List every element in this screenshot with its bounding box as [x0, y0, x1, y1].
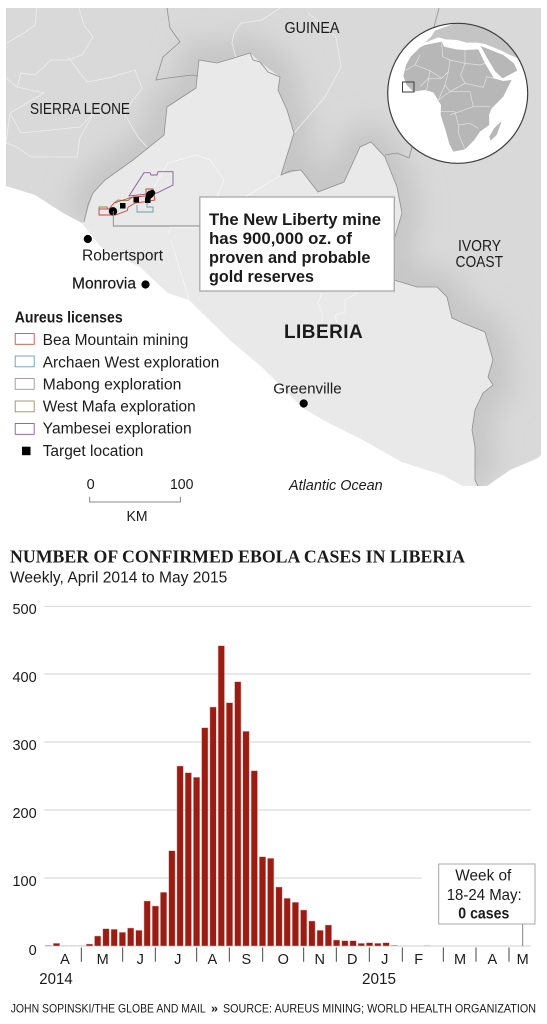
callout: week of 18-24 May: 18-24 May: — [447, 887, 522, 904]
Madagascar — [489, 122, 502, 141]
legend: Aureus licenses: Aureus licenses — [15, 310, 123, 327]
map of Liberia region — [6, 8, 541, 498]
Archaen West exploration — [137, 203, 153, 212]
legend: Aureus licenses: Bea Mountain mining — [43, 332, 188, 349]
month ticks — [81, 948, 509, 962]
map labels: Robertsport — [82, 248, 164, 264]
Africa — [403, 42, 512, 152]
legend: Aureus licenses: West Mafa exploration — [43, 399, 196, 416]
map labels: Greenville — [273, 380, 342, 397]
locator square — [402, 82, 414, 92]
y axis labels: 500 — [12, 602, 37, 618]
month labels — [60, 952, 529, 968]
month labels: M — [517, 952, 529, 968]
source line: » — [211, 1001, 218, 1015]
map labels: Atlantic Ocean — [288, 477, 383, 494]
Bea Mountain mining — [99, 189, 155, 215]
bar chart: weekly confirmed Ebola cases — [12, 602, 531, 988]
month labels: M — [454, 952, 466, 968]
y axis labels — [12, 602, 37, 959]
icon: locator globe — [388, 22, 528, 163]
West Mafa exploration — [99, 198, 132, 209]
map labels: GUINEA — [284, 20, 340, 37]
scale bar: 0 — [87, 477, 95, 493]
callout: New Liberty mine: gold reserves — [209, 267, 314, 286]
Liberia land border — [84, 53, 493, 486]
month labels: J — [174, 952, 181, 968]
month labels: D — [347, 952, 358, 968]
callout: New Liberty mine — [109, 197, 394, 291]
month labels: N — [314, 952, 325, 968]
target locations — [120, 190, 155, 208]
scale bar: 100 — [170, 477, 193, 493]
y axis labels: 100 — [12, 874, 37, 890]
y axis labels: 400 — [12, 670, 37, 686]
year labels — [39, 971, 396, 988]
month labels: M — [97, 952, 109, 968]
map labels: COAST — [456, 254, 503, 271]
map labels: Monrovia — [72, 276, 136, 293]
legend: Aureus licenses: Yambesei exploration — [43, 421, 192, 438]
chart subtitle: Weekly, April 2014 to May 2015 — [10, 570, 227, 587]
map labels — [30, 20, 503, 494]
legend: Aureus licenses: Mabong exploration — [43, 376, 181, 393]
Europe — [425, 22, 518, 58]
y axis labels: 300 — [12, 738, 37, 754]
legend: Aureus licenses: Archaen West exploration — [43, 354, 219, 371]
source line: JOHN SOPINSKI/THE GLOBE AND MAIL — [11, 1001, 206, 1015]
callout: week of 18-24 May — [439, 864, 535, 946]
year labels: 2014 — [39, 971, 73, 988]
month labels: S — [241, 952, 251, 968]
scale bar: KM — [126, 509, 148, 525]
legend: Aureus licenses: Target location — [43, 443, 143, 460]
month labels: A — [60, 952, 70, 968]
month labels: J — [381, 952, 388, 968]
legend: Aureus licenses — [15, 310, 219, 460]
license areas — [99, 172, 173, 215]
city dots — [84, 235, 308, 408]
map labels: SIERRA LEONE — [30, 101, 130, 118]
callout: New Liberty mine: The New Liberty mine — [209, 210, 381, 229]
month labels: A — [207, 952, 217, 968]
map labels: IVORY — [458, 238, 501, 255]
callout: New Liberty mine: proven and probable — [209, 248, 370, 267]
month labels: J — [137, 952, 144, 968]
Arabia — [481, 46, 517, 78]
callout: week of 18-24 May: Week of — [455, 868, 512, 885]
year labels: 2015 — [362, 971, 396, 988]
scale bar — [87, 477, 193, 525]
month labels: A — [487, 952, 497, 968]
Yambesei exploration — [129, 172, 173, 196]
land: Liberia — [82, 53, 493, 486]
y axis labels: 0 — [29, 943, 37, 959]
chart heading: NUMBER OF CONFIRMED EBOLA CASES IN LIBERIA — [10, 547, 465, 567]
month labels: O — [278, 952, 289, 968]
map labels: LIBERIA — [284, 322, 363, 343]
source line — [11, 1001, 536, 1015]
bars — [45, 646, 430, 946]
month labels: F — [414, 952, 423, 968]
y axis labels: 200 — [12, 806, 37, 822]
callout: week of 18-24 May: 0 cases — [458, 906, 509, 923]
land: neighbouring countries — [6, 8, 541, 498]
callout: New Liberty mine: has 900,000 oz. of — [209, 229, 352, 248]
